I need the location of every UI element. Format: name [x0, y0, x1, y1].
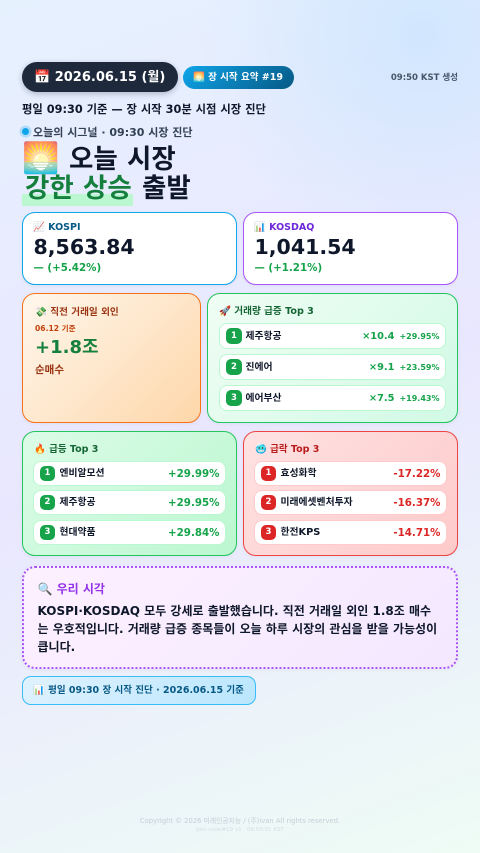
panel: foreign net buying: [22, 293, 201, 423]
loser row 1: [254, 461, 447, 486]
gainer row 3: 3: [45, 526, 50, 536]
foreign note: 순매수: [35, 364, 64, 376]
our view heading: 🔍 우리 시각: [38, 582, 105, 596]
our view body: [38, 604, 437, 654]
signal dot: [22, 128, 29, 135]
losers heading: 🥶 급락 Top 3: [255, 444, 319, 455]
headline line one: 오늘 시장: [69, 144, 176, 175]
volume row 3: [219, 385, 446, 411]
volume heading: 🚀 거래량 급증 Top 3: [219, 306, 314, 317]
sunrise icon: 🌅: [22, 141, 59, 176]
our view body: 큽니다.: [38, 640, 75, 654]
highlight bar: [22, 194, 133, 206]
panel: top gainers: [22, 431, 237, 556]
loser row 3: 한전KPS: [280, 526, 320, 538]
volume row 3: 에어부산: [246, 392, 282, 404]
KOSPI change: — (+5.42%): [34, 262, 101, 274]
gainer row 2: 2: [45, 496, 50, 506]
signal text: 오늘의 시그널 · 09:30 시장 진단: [33, 126, 193, 139]
date pill: [22, 62, 178, 92]
loser row 2: 2: [266, 496, 271, 506]
loser row 3: 3: [266, 526, 271, 536]
headline: [22, 141, 191, 206]
basis tag: 📊 평일 09:30 장 시작 진단 · 2026.06.15 기준: [33, 685, 244, 696]
gainer row 1: +29.99%: [168, 468, 220, 480]
loser row 3: -14.71%: [393, 526, 440, 538]
edition badge: [183, 66, 294, 89]
volume row 2: 2: [231, 362, 237, 372]
basis tag: [22, 676, 256, 705]
date pill: 📅 2026.06.15 (월): [34, 70, 165, 85]
foreign date: 06.12 기준: [35, 324, 76, 333]
foreign heading: 💸 직전 거래일 외인: [35, 307, 119, 318]
KOSDAQ change: — (+1.21%): [254, 262, 322, 274]
KOSPI label: 📈 KOSPI: [33, 222, 80, 233]
volume row 3: 3: [231, 392, 237, 402]
gainer row 1: [33, 461, 226, 486]
signal label: [20, 126, 193, 139]
panel: our view: [22, 566, 458, 669]
loser row 1: 효성화학: [280, 468, 317, 478]
gainer row 1: 1: [45, 468, 50, 478]
volume row 3: ×7.5 +19.43%: [369, 392, 440, 404]
gainer row 2: [33, 490, 226, 515]
our view body: 는 우호적입니다. 거래량 급증 종목들이 오늘 하루 시장의 관심을 받을 가능성이: [38, 622, 437, 636]
subtitle: 평일 09:30 기준 — 장 시작 30분 시점 시장 진단: [22, 103, 266, 116]
loser row 2: [254, 490, 447, 515]
loser row 1: 1: [266, 468, 271, 478]
KOSDAQ value: 1,041.54: [254, 235, 356, 259]
headline line two: 출발: [142, 173, 191, 204]
gainer row 3: 현대약품: [60, 526, 96, 538]
volume row 1: ×10.4 +29.95%: [362, 330, 440, 342]
volume row 2: [219, 354, 446, 380]
KOSDAQ label: 📊 KOSDAQ: [254, 222, 314, 233]
copyright: Copyright © 2026 미래인공지능 / (주)ivan All rights reserved.: [140, 817, 340, 825]
gainer row 1: 엔비알모션: [60, 468, 105, 478]
KOSPI value: 8,563.84: [34, 235, 135, 259]
gainers heading: 🔥 급등 Top 3: [34, 444, 98, 455]
gainer row 3: +29.84%: [168, 526, 220, 538]
loser row 2: -16.37%: [393, 496, 440, 508]
loser row 1: -17.22%: [393, 468, 440, 480]
volume row 1: 제주항공: [246, 330, 282, 342]
our view body: KOSPI·KOSDAQ 모두 강세로 출발했습니다. 직전 거래일 외인 1.8조 매수: [38, 604, 431, 618]
headline accent: 강한 상승: [25, 173, 132, 204]
volume row 1: 1: [231, 330, 237, 340]
panel: KOSDAQ: [243, 212, 458, 285]
panel: volume surge: [207, 293, 458, 423]
generated time: 09:50 KST 생성: [391, 73, 458, 83]
panel: top losers: [243, 431, 458, 556]
gainer row 3: [33, 520, 226, 545]
gainer row 2: +29.95%: [168, 496, 220, 508]
volume row 2: ×9.1 +23.59%: [369, 362, 440, 372]
edition badge: 🌅 장 시작 요약 #19: [193, 72, 283, 83]
volume row 1: [219, 323, 446, 349]
panel: KOSPI: [22, 212, 237, 285]
gainer row 2: 제주항공: [60, 496, 96, 508]
volume row 2: 진에어: [246, 362, 273, 372]
loser row 3: [254, 520, 447, 545]
foreign value: +1.8조: [35, 337, 99, 358]
build stamp: pnc-code#19 v1 · 09:50:01 KST: [196, 827, 284, 833]
loser row 2: 미래에셋벤처투자: [280, 496, 353, 508]
